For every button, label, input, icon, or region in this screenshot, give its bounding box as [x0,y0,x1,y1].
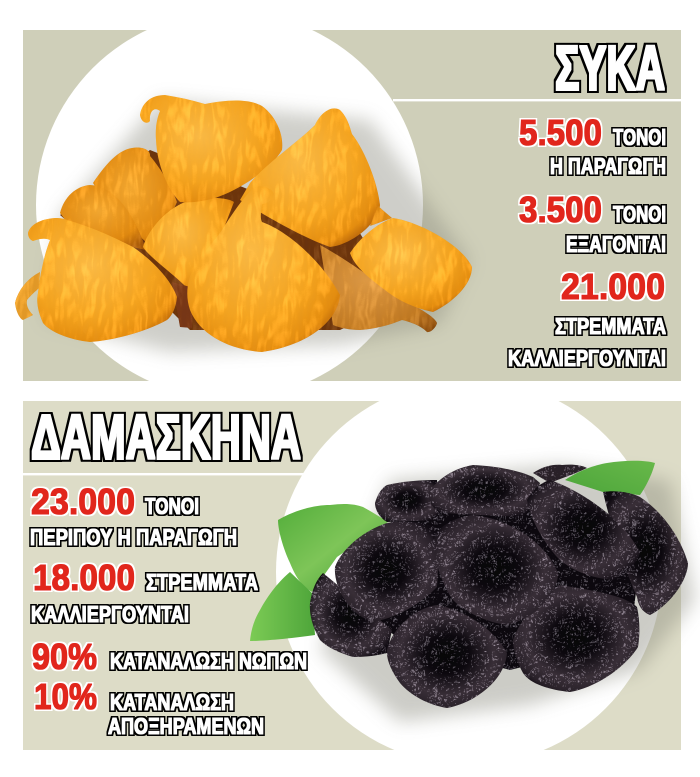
panel: figs [15,12,681,398]
prune back right small [533,465,587,483]
prune top [428,465,540,517]
stat: 21.000 stremmata: ΣΤΡΕΜΜΑΤΑ [555,313,666,339]
fig cluster base [60,150,400,330]
fig left stem [15,272,40,320]
stat: 10% dried: 10% [34,676,97,717]
stat: 3.500 exports [519,189,666,257]
stat: 3.500 exports: 3.500 [519,189,602,230]
fig right upper [240,108,380,247]
stat: 18.000 stremmata: ΣΤΡΕΜΜΑΤΑ [146,569,258,595]
stat: 21.000 stremmata [508,266,666,371]
stat: 5.500 production: Η ΠΑΡΑΓΩΓΗ [550,153,666,179]
prune bottom right [513,585,639,692]
prune right upper [527,480,640,580]
stat: 3.500 exports: ΤΟΝΟΙ [613,201,666,227]
stat: 18.000 stremmata [31,557,258,627]
prune right [603,491,688,615]
fig top centre [140,95,282,202]
stat: 90% fresh: ΚΑΤΑΝΑΛΩΣΗ ΝΩΠΩΝ [110,648,307,674]
stat: 23.000 production: 23.000 [31,481,135,522]
divider line [23,473,305,475]
shadow under prunes [320,465,695,722]
stat: 90% fresh [32,636,307,677]
divider line [393,99,681,101]
illustration: prunes and leaves [250,461,688,708]
stat: 18.000 stremmata: ΚΑΛΛΙΕΡΓΟΥΝΤΑΙ [31,601,189,627]
white circle behind figs [36,12,423,398]
fig bottom right, brown [320,245,437,332]
fig left large [28,218,177,342]
stat: 23.000 production: ΠΕΡΙΠΟΥ Η ΠΑΡΑΓΩΓΗ [30,524,237,550]
stat: 21.000 stremmata: 21.000 [561,266,665,307]
prune bottom centre [387,605,507,708]
leaf right [565,461,655,495]
stat: 5.500 production: 5.500 [519,112,602,153]
prune cluster base [340,500,640,670]
fig mid left [60,185,146,250]
stat: 23.000 production [30,481,237,550]
stat: 5.500 production [519,112,666,179]
leaf left lower [250,572,315,641]
fig right sliver [370,206,392,226]
stat: 18.000 stremmata: 18.000 [33,557,135,598]
fig right [350,218,472,312]
fig front large [187,186,340,352]
white circle behind prunes [276,401,658,750]
stat: 90% fresh: 90% [32,636,97,677]
leaf left upper [278,504,388,592]
shadow under figs [45,100,470,352]
fig centre behind [143,198,234,290]
stat: 3.500 exports: ΕΞΑΓΟΝΤΑΙ [566,231,666,257]
prune back left [375,480,440,522]
stat: 5.500 production: ΤΟΝΟΙ [613,124,666,150]
prune centre [433,515,558,625]
stat: 10% dried: ΚΑΤΑΝΑΛΩΣΗ [110,689,234,715]
prune left [335,522,438,622]
fig centre shadow [172,282,194,328]
heading: prunes: ΔΑΜΑΣΚΗΝΑ [31,401,301,473]
fig back left [93,147,177,250]
stat: 10% dried: ΑΠΟΞΗΡΑΜΕΝΩΝ [108,713,264,739]
stat: 23.000 production: ΤΟΝΟΙ [145,493,199,519]
panel: prunes [23,379,695,765]
prune far left [310,573,392,657]
stat: 10% dried [34,676,264,739]
illustration: dried figs [15,95,472,352]
